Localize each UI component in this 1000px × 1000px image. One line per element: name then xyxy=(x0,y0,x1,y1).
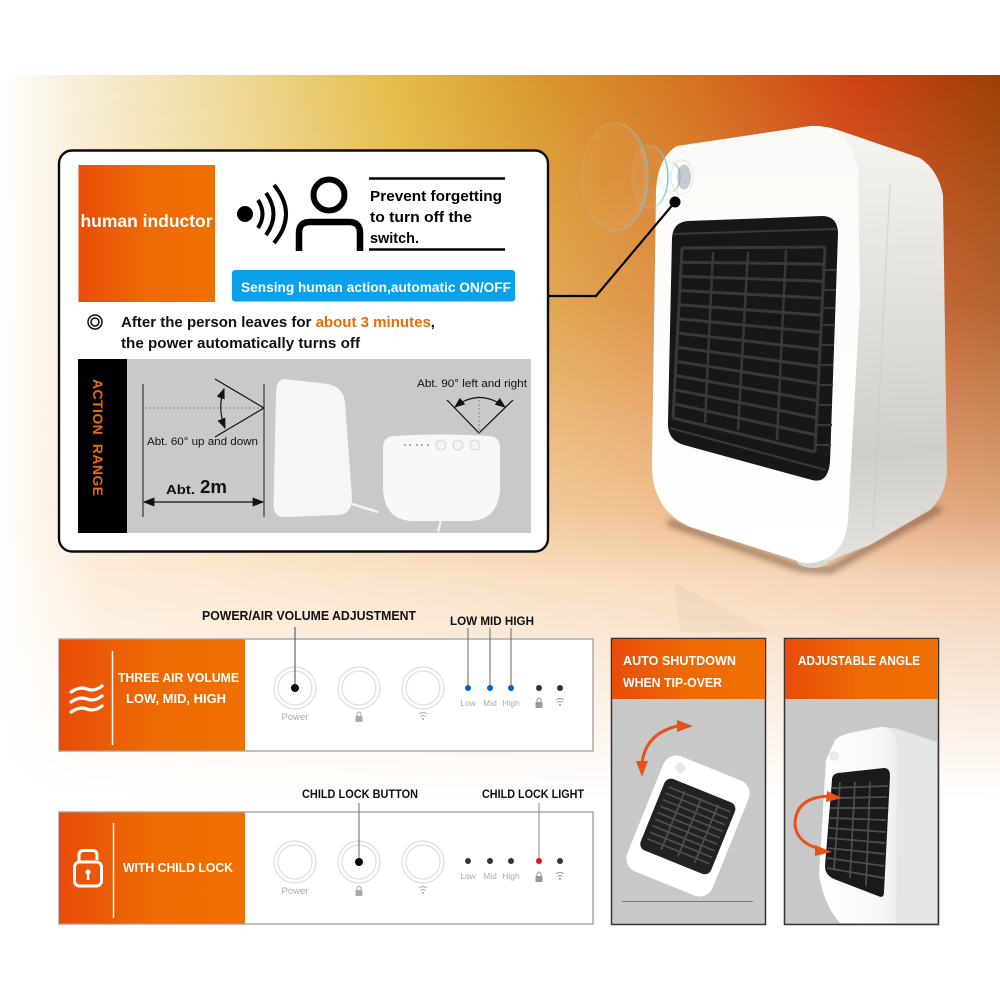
panel: three air volume xyxy=(59,609,593,751)
background gradient xyxy=(14,75,1000,774)
heater front face xyxy=(652,126,860,563)
air volume text: THREE AIR VOLUME xyxy=(118,671,239,685)
heater at angle xyxy=(819,727,937,923)
orange heading block: human inductor xyxy=(80,211,213,231)
icon: air waves xyxy=(71,686,102,712)
distance dimension: Abt. xyxy=(166,482,195,497)
control labels: CHILD LOCK BUTTON xyxy=(302,789,418,801)
auto shutdown heading: WHEN TIP-OVER xyxy=(623,676,722,690)
auto-off note: After the person leaves for about 3 minutes , xyxy=(121,315,435,331)
control buttons xyxy=(274,627,444,723)
heater side view xyxy=(274,379,378,517)
panel: auto shutdown xyxy=(612,638,766,924)
control labels: CHILD LOCK LIGHT xyxy=(482,789,584,801)
ground line xyxy=(622,900,753,902)
orange block xyxy=(59,640,245,750)
horizontal sensing angle: Abt. 90° left and right xyxy=(417,378,527,390)
heater floor shadow xyxy=(668,508,940,570)
motion sensor xyxy=(671,160,693,194)
auto shutdown heading xyxy=(623,654,736,690)
sensing waves xyxy=(582,123,680,231)
adjustable angle heading: ADJUSTABLE ANGLE xyxy=(798,654,920,668)
heater feet xyxy=(798,556,828,568)
indicator lights: Mid xyxy=(483,698,497,708)
control labels: LOW MID HIGH xyxy=(450,616,534,628)
distance dimension xyxy=(144,477,263,502)
heater top view xyxy=(383,434,500,532)
orange header xyxy=(785,639,938,699)
indicator lights xyxy=(460,628,564,708)
indicator lights: Low xyxy=(460,871,477,881)
heater product photo xyxy=(582,123,947,570)
indicator lights xyxy=(460,803,564,882)
panel: adjustable angle xyxy=(784,638,938,924)
icon: padlock xyxy=(74,850,102,886)
air volume text: LOW, MID, HIGH xyxy=(126,692,226,706)
auto-off note xyxy=(88,315,435,352)
air volume text xyxy=(118,671,239,706)
tilted heater xyxy=(622,751,754,901)
panel: human inductor xyxy=(59,150,548,552)
action range diagram xyxy=(78,359,531,533)
child lock text: WITH CHILD LOCK xyxy=(123,861,233,875)
orange block xyxy=(59,812,245,924)
heater side body xyxy=(800,126,947,562)
icon: signal waves and person xyxy=(237,180,360,251)
callout: prevent forgetting xyxy=(369,178,505,250)
vertical sensing angle xyxy=(143,379,264,517)
auto-off note: the power automatically turns off xyxy=(121,336,360,352)
indicator lights: Low xyxy=(460,698,477,708)
control buttons xyxy=(274,803,444,897)
orange header xyxy=(612,639,765,699)
heater grille xyxy=(668,216,838,481)
indicator lights: Mid xyxy=(483,871,497,881)
indicator lights: High xyxy=(502,698,520,708)
action range label: ACTION RANGE xyxy=(90,379,106,496)
leader line from sensor to panel xyxy=(548,196,680,296)
orange heading block xyxy=(78,165,215,302)
callout: prevent forgetting: switch. xyxy=(370,231,419,247)
control buttons: Power xyxy=(282,712,308,723)
callout: prevent forgetting: to turn off the xyxy=(370,210,472,226)
distance dimension: 2m xyxy=(200,477,227,497)
panel: child lock xyxy=(59,789,593,924)
horizontal sensing angle xyxy=(417,378,527,433)
indicator lights: High xyxy=(502,871,520,881)
arrow: tilt xyxy=(636,720,693,777)
heater floor reflection xyxy=(674,583,770,632)
callout: prevent forgetting: Prevent forgetting xyxy=(370,189,502,205)
control buttons: Power xyxy=(282,886,308,897)
blue banner: Sensing human action,automatic ON/OFF xyxy=(241,280,511,295)
control labels xyxy=(302,789,584,801)
control labels xyxy=(202,609,534,628)
control labels: POWER/AIR VOLUME ADJUSTMENT xyxy=(202,609,416,623)
vertical sensing angle: Abt. 60° up and down xyxy=(147,436,258,448)
auto shutdown heading: AUTO SHUTDOWN xyxy=(623,654,736,668)
arrow: angle xyxy=(795,791,842,856)
blue banner xyxy=(232,270,515,302)
